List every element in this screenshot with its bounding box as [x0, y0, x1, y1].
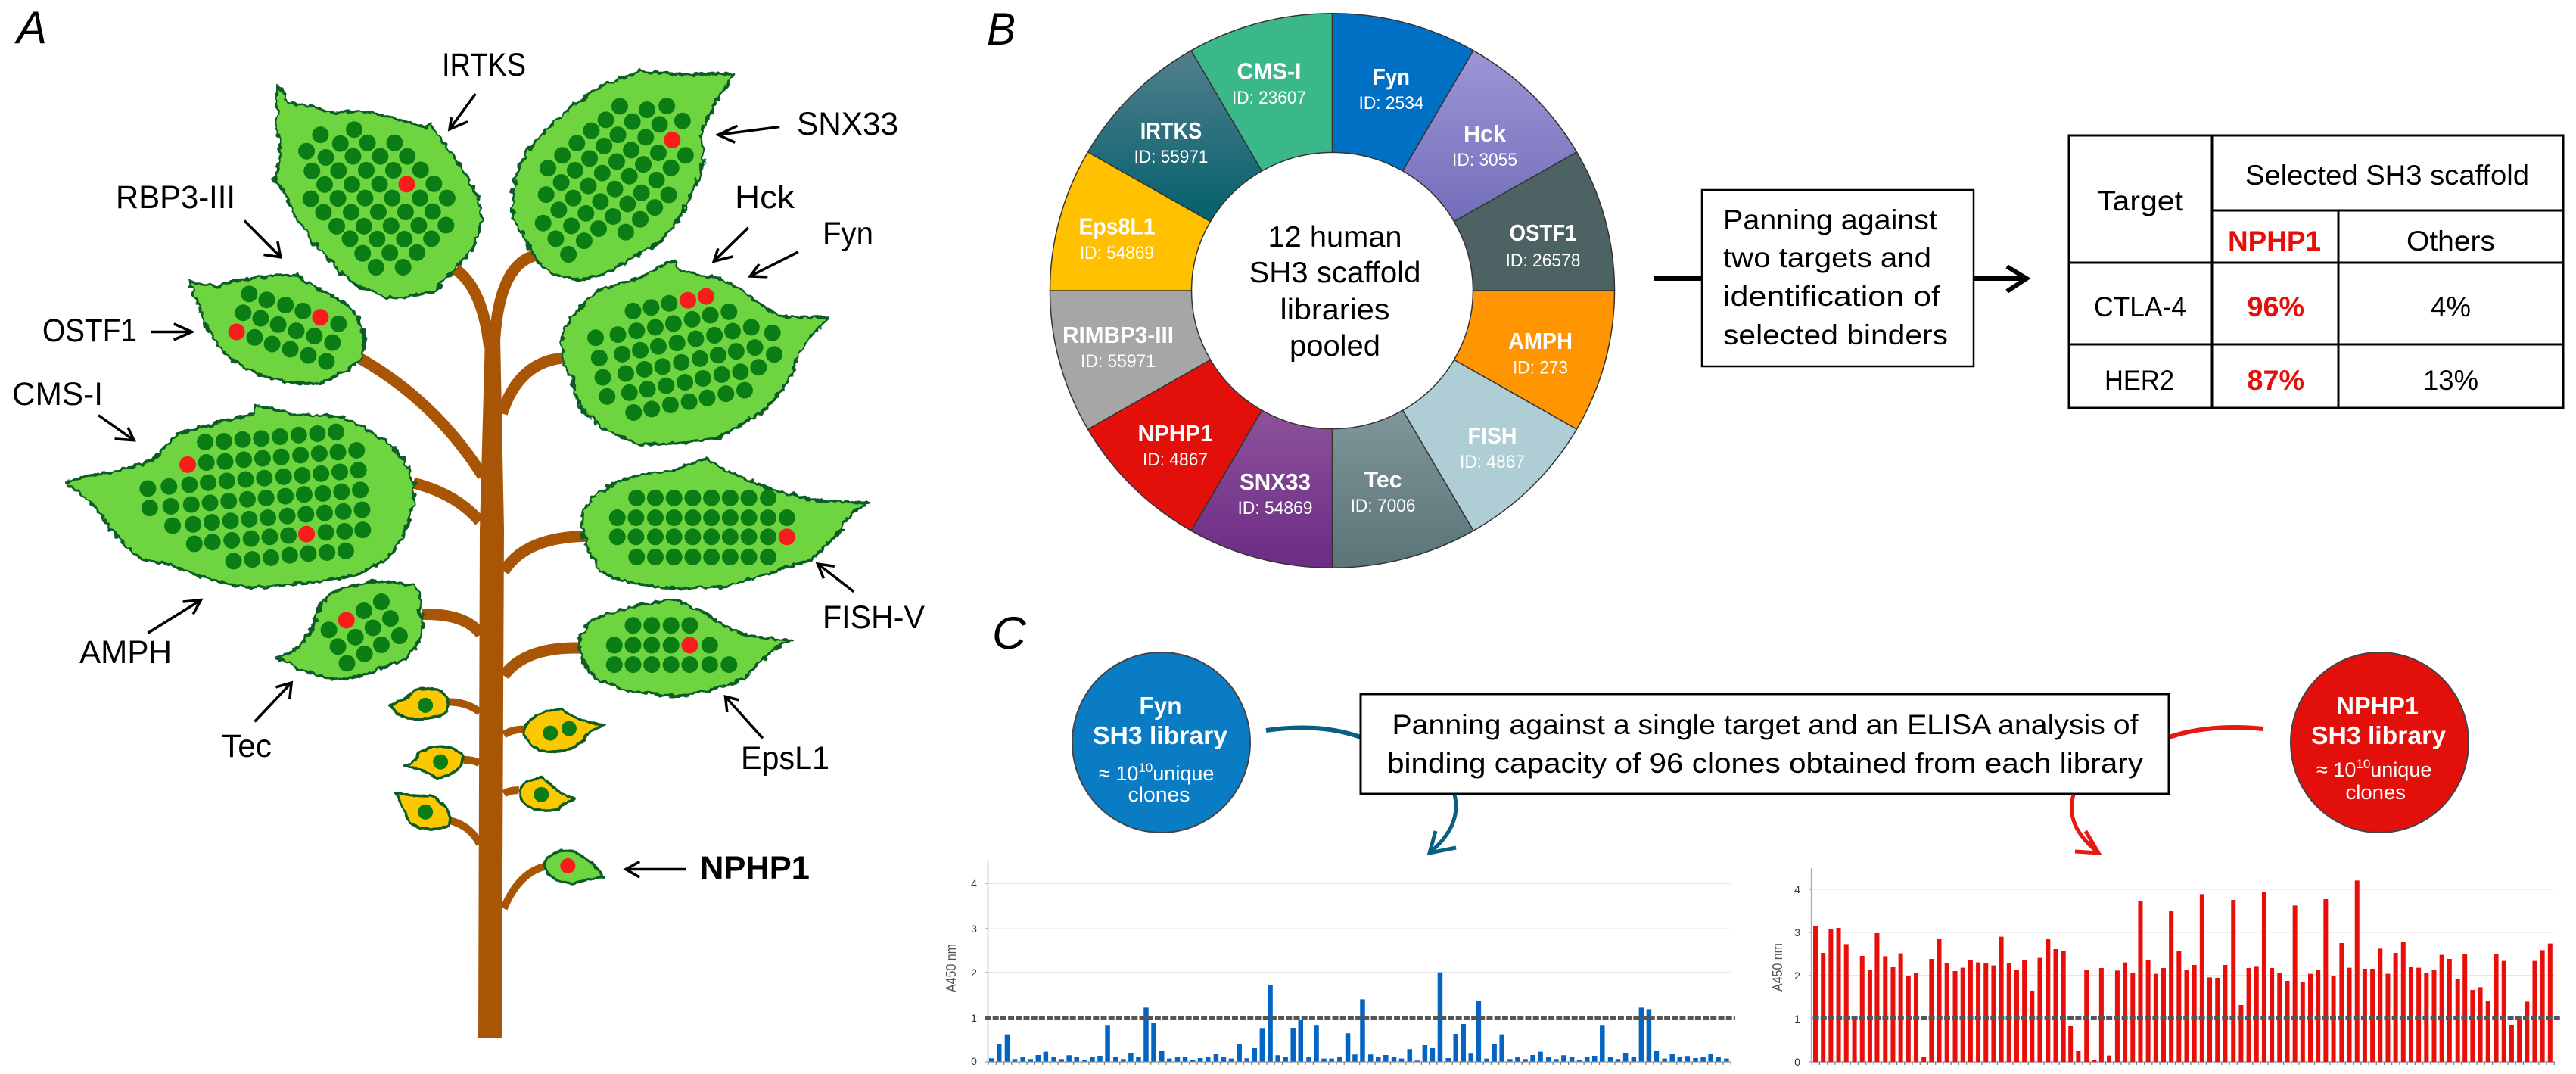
leaf: NPHP1: [544, 851, 603, 883]
donut centre text: 12 human: [1268, 221, 1402, 254]
leaf labels: Tec: [222, 728, 272, 764]
leaf: CMS-I and AMPH: [64, 405, 414, 588]
donut segment labels: ID: 55971: [1134, 147, 1208, 167]
donut segment labels: Fyn: [1373, 64, 1410, 90]
panning box: Panning against: [1723, 204, 1938, 235]
lower label arrows: [148, 564, 854, 877]
arrow to table: [1974, 266, 2027, 291]
panning and ELISA box: Panning against a single target and an ELISA analysis of: [1392, 709, 2139, 740]
panning box: [1702, 190, 1974, 366]
donut chart: [1050, 14, 1615, 568]
results table: HER2: [2105, 365, 2174, 396]
donut segment labels: ID: 4867: [1460, 452, 1525, 472]
leaf: SNX33: [512, 71, 735, 280]
donut segment labels: ID: 2534: [1359, 93, 1424, 114]
blue bar chart: Fyn library: 0: [971, 1055, 977, 1067]
blue bar chart: Fyn library: 3: [971, 923, 977, 935]
donut segment labels: OSTF1: [1509, 219, 1577, 246]
leaf labels: IRTKS: [442, 47, 526, 83]
donut segment labels: ID: 273: [1513, 357, 1568, 378]
red bar chart: NPHP1 library: 3: [1794, 926, 1800, 939]
blue bar chart: Fyn library: 2: [971, 967, 977, 979]
leaf labels: NPHP1: [700, 850, 810, 886]
leaf labels: CMS-I: [12, 376, 103, 412]
donut segment labels: ID: 4867: [1143, 450, 1208, 470]
donut segment labels: FISH: [1468, 422, 1517, 449]
teal arrow to blue chart: [1430, 795, 1456, 853]
tree branches: [356, 255, 588, 908]
donut centre text: libraries: [1280, 294, 1389, 326]
results table: 13%: [2423, 365, 2478, 396]
blue bar chart: Fyn library: A450 nm: [944, 944, 959, 992]
Fyn library circle: SH3 library: [1093, 721, 1228, 749]
connector line into panning box: [1654, 276, 1702, 281]
leaf: OSTF1: [188, 275, 363, 384]
donut segment labels: ID: 55971: [1081, 351, 1156, 372]
donut segment labels: ID: 23607: [1232, 88, 1306, 108]
NPHP1 library circle: 10: [2356, 757, 2370, 771]
panel letter C: C: [992, 608, 1027, 658]
leaf labels: Hck: [735, 179, 795, 216]
donut segment labels: ID: 54869: [1080, 243, 1154, 263]
donut segment labels: ID: 54869: [1238, 498, 1312, 518]
results table: 96%: [2248, 291, 2304, 322]
Fyn library circle: unique: [1153, 762, 1214, 785]
panel C: single-library panning and ELISA: [944, 608, 2562, 1068]
donut centre text: [1249, 221, 1421, 363]
donut segment labels: IRTKS: [1140, 117, 1202, 144]
NPHP1 library circle: clones: [2346, 781, 2406, 804]
results table: Selected SH3 scaffold: [2245, 160, 2529, 191]
panning box: two targets and: [1723, 242, 1931, 273]
panning box: selected binders: [1723, 319, 1948, 350]
donut segment labels: [1062, 58, 1580, 518]
donut segment labels: Hck: [1464, 120, 1507, 147]
donut segment labels: RIMBP3-III: [1062, 322, 1174, 348]
panning and ELISA box: [1361, 694, 2169, 794]
results table: NPHP1: [2228, 226, 2321, 257]
NPHP1 library circle: unique: [2370, 758, 2431, 781]
leaf: Fyn and Hck: [562, 260, 829, 445]
donut segment labels: ID: 26578: [1506, 251, 1580, 271]
panel letter A: A: [14, 2, 47, 53]
donut centre text: SH3 scaffold: [1249, 257, 1421, 289]
donut segment labels: Tec: [1364, 466, 1402, 493]
panel B: scaffold donut and table: [987, 4, 2563, 568]
results table: Others: [2406, 226, 2495, 257]
red bar chart: NPHP1 library: [1770, 868, 2562, 1068]
leaf labels: [12, 47, 925, 886]
donut segment labels: NPHP1: [1138, 420, 1212, 447]
red arrow to red chart: [2071, 795, 2098, 853]
results table: 4%: [2431, 291, 2471, 322]
donut segment labels: SNX33: [1240, 469, 1311, 495]
leaf labels: Fyn: [823, 216, 873, 252]
blue bar chart: Fyn library: 4: [971, 877, 977, 889]
red bar chart: NPHP1 library: 2: [1794, 970, 1800, 982]
NPHP1 library circle: [2291, 652, 2469, 833]
leaf labels: OSTF1: [42, 313, 137, 349]
teal connector from Fyn circle: [1266, 728, 1361, 737]
donut segment labels: ID: 7006: [1351, 496, 1416, 516]
red bar chart: NPHP1 library: 4: [1794, 883, 1800, 895]
donut segment labels: Eps8L1: [1079, 213, 1155, 239]
NPHP1 library circle: ≈ 10: [2316, 758, 2356, 781]
results table: [2069, 135, 2563, 408]
leaf labels: EpsL1: [741, 740, 829, 777]
leaf: FISH-V: [582, 459, 869, 589]
blue bar chart: Fyn library: [944, 861, 1735, 1067]
panning and ELISA box: binding capacity of 96 clones obtained from each library: [1387, 748, 2144, 779]
results table: CTLA-4: [2094, 291, 2186, 322]
panning box: identification of: [1723, 281, 1941, 312]
leaf labels: SNX33: [797, 106, 898, 142]
donut segment labels: CMS-I: [1237, 58, 1302, 85]
Fyn library circle: ≈ 10: [1099, 762, 1138, 785]
leaf labels: FISH-V: [823, 599, 925, 636]
label arrows: [98, 94, 798, 440]
small yellow leaves: [389, 689, 605, 829]
panel A: SH3 scaffold tree: [12, 2, 925, 1038]
tree stem: [478, 337, 504, 1038]
leaf: IRTKS: [275, 85, 481, 299]
Fyn library circle: 10: [1138, 761, 1153, 775]
leaf: Tec: [278, 581, 422, 680]
results table: 87%: [2248, 365, 2304, 396]
Fyn library circle: [1072, 652, 1250, 833]
red bar chart: NPHP1 library: A450 nm: [1770, 943, 1785, 992]
red bar chart: NPHP1 library: 0: [1794, 1056, 1800, 1068]
blue bar chart: Fyn library: 1: [971, 1012, 977, 1024]
panel letter B: B: [987, 4, 1016, 54]
Fyn library circle: clones: [1128, 783, 1190, 806]
Fyn library circle: Fyn: [1140, 692, 1182, 720]
leaf: EpsL1: [579, 599, 791, 696]
results table: Target: [2097, 185, 2184, 216]
red bar chart: NPHP1 library: 1: [1794, 1013, 1800, 1025]
NPHP1 library circle: SH3 library: [2311, 721, 2447, 749]
leaf labels: RBP3-III: [116, 179, 235, 216]
leaf labels: AMPH: [79, 634, 172, 671]
donut centre text: pooled: [1290, 330, 1380, 363]
donut segment labels: AMPH: [1508, 328, 1573, 354]
NPHP1 library circle: NPHP1: [2337, 692, 2419, 720]
red connector from NPHP1 circle: [2169, 727, 2263, 737]
donut segment labels: ID: 3055: [1452, 150, 1517, 170]
